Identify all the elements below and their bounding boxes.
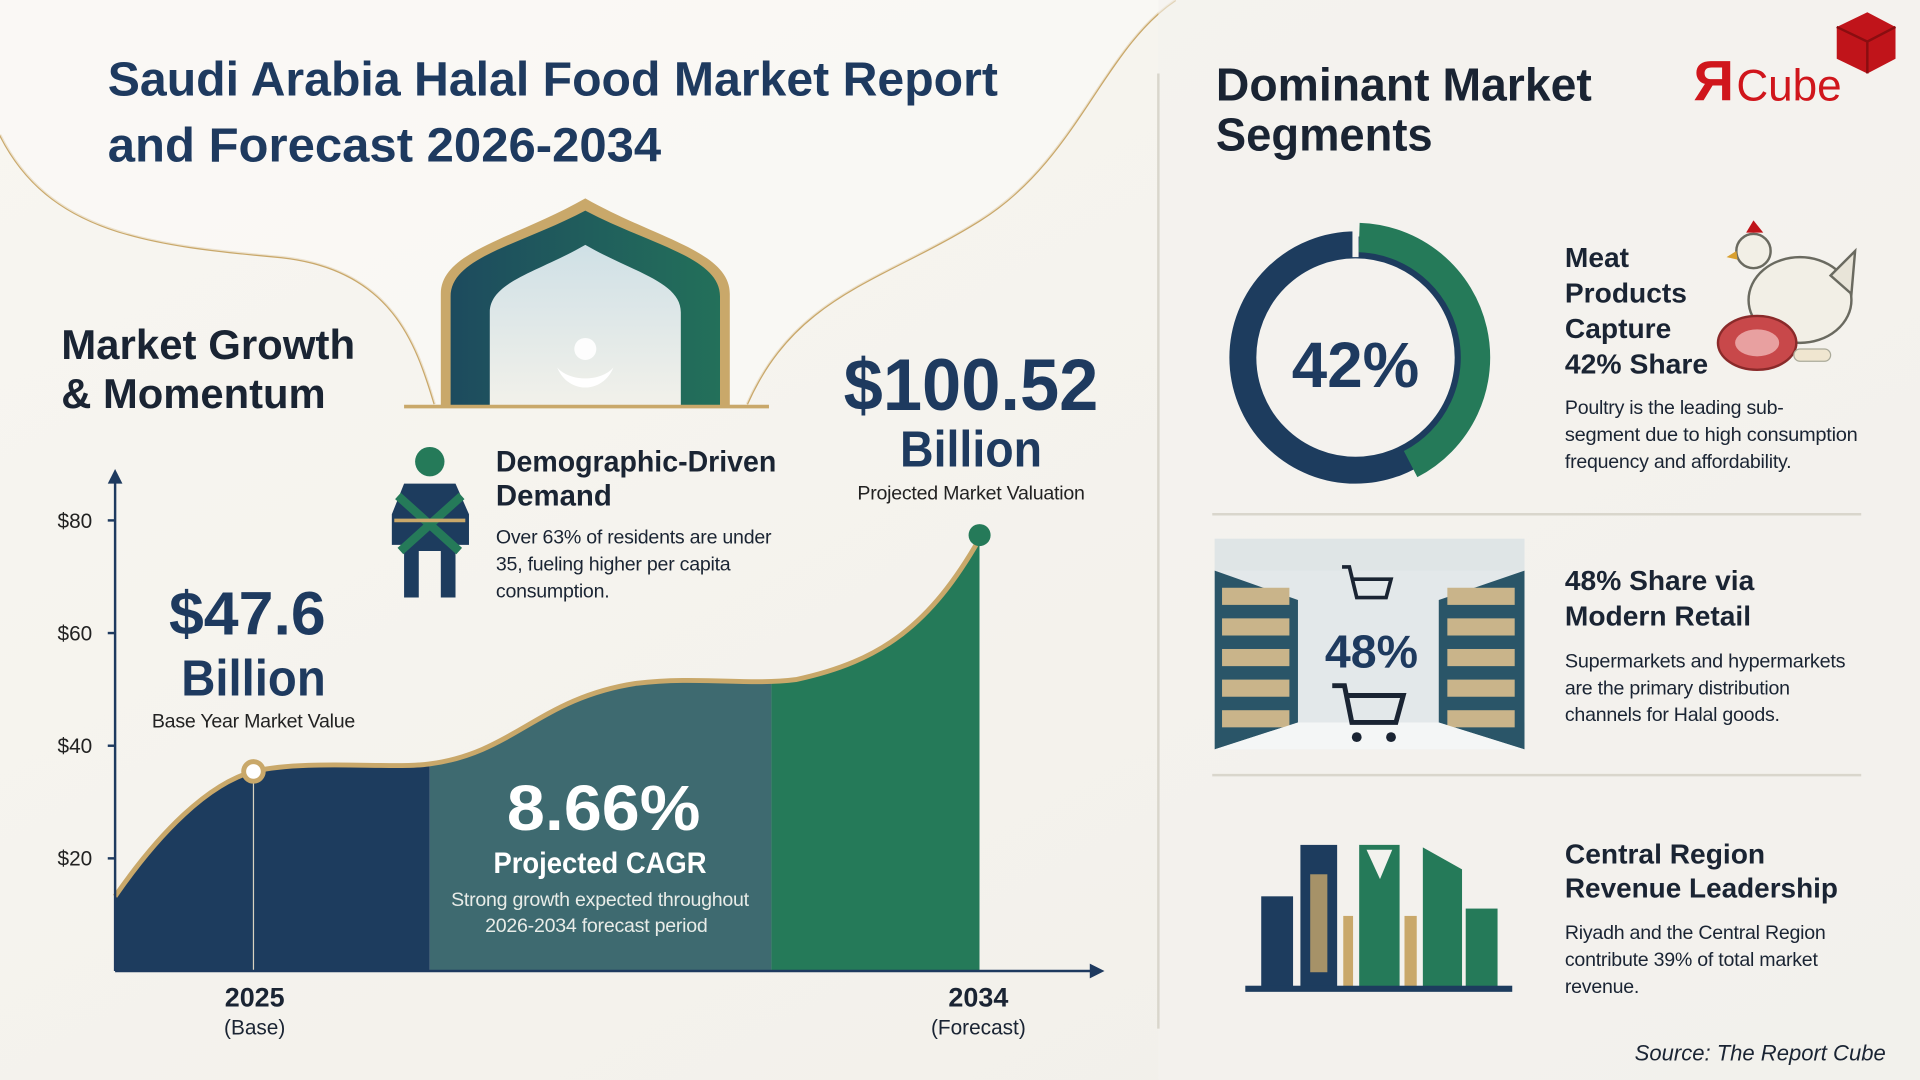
logo: Cube	[1736, 61, 1842, 110]
logo: Я	[1693, 49, 1734, 112]
text: projected value: Projected Market Valuation	[857, 483, 1085, 505]
text: meat products: 42% Share	[1565, 348, 1708, 379]
text: projected value: $100.52	[844, 343, 1098, 426]
text: meat products: Capture	[1565, 313, 1671, 344]
chart: area growth: $80	[58, 510, 92, 533]
text: CAGR: Strong growth expected throughout	[451, 889, 750, 911]
text: demographic demand: 35, fueling higher per capita	[496, 554, 731, 576]
x labels: 2025	[225, 983, 285, 1013]
text: demographic demand: Over 63% of residents are under	[496, 527, 772, 549]
chart: area growth: $40	[58, 735, 92, 758]
text: base value	[152, 579, 355, 732]
x labels: 2034	[948, 983, 1008, 1013]
heading: dominant segments: Segments	[1216, 109, 1433, 161]
icon: person	[392, 447, 469, 598]
text: base value: $47.6	[169, 579, 326, 647]
text: modern retail	[1565, 565, 1846, 726]
text: demographic demand: Demographic-Driven	[496, 445, 776, 478]
chart: area growth: $20	[58, 848, 92, 871]
chart: area growth	[58, 469, 1104, 980]
text: central region: Riyadh and the Central Region	[1565, 922, 1826, 944]
text: central region	[1565, 838, 1838, 998]
text: central region: Revenue Leadership	[1565, 873, 1838, 904]
text: base value: Billion	[181, 649, 326, 707]
text: modern retail: Modern Retail	[1565, 601, 1751, 632]
text: modern retail: channels for Halal goods.	[1565, 704, 1780, 726]
text: meat products	[1565, 242, 1858, 473]
text: projected value: Billion	[900, 420, 1042, 478]
text: central region: contribute 39% of total market	[1565, 949, 1818, 971]
text: demographic demand: consumption.	[496, 581, 609, 603]
icon: retail store: 48%	[1325, 625, 1418, 677]
title: Saudi Arabia Halal Food Market Report	[108, 54, 998, 107]
icon: mosque arch	[404, 198, 769, 407]
text: central region: revenue.	[1565, 976, 1639, 998]
icon: chicken and meat	[1718, 220, 1855, 370]
logo	[1693, 12, 1896, 112]
donut chart: 42%	[1243, 220, 1481, 470]
right panel background	[1158, 0, 1920, 1080]
x labels: (Forecast)	[931, 1017, 1026, 1040]
chart: area growth: $60	[58, 622, 92, 645]
heading: market growth: Market Growth	[61, 321, 355, 368]
text: CAGR: 8.66%	[507, 773, 700, 844]
text: meat products: Products	[1565, 277, 1687, 308]
title	[108, 54, 998, 173]
text: modern retail: Supermarkets and hypermarkets	[1565, 650, 1846, 672]
text: meat products: frequency and affordability.	[1565, 451, 1791, 473]
text: modern retail: 48% Share via	[1565, 565, 1755, 596]
text: CAGR: Projected CAGR	[493, 847, 707, 880]
source: Source: The Report Cube	[1635, 1040, 1886, 1065]
heading: dominant segments: Dominant Market	[1216, 58, 1592, 110]
x labels	[224, 983, 1026, 1040]
x labels: (Base)	[224, 1017, 285, 1040]
text: demographic demand	[496, 445, 776, 603]
text: modern retail: are the primary distribution	[1565, 677, 1790, 699]
text: central region: Central Region	[1565, 838, 1765, 869]
text: meat products: Poultry is the leading sub-	[1565, 397, 1784, 419]
heading: dominant segments	[1216, 58, 1592, 161]
text: meat products: segment due to high consumption	[1565, 424, 1858, 446]
text: CAGR	[451, 773, 750, 937]
text: CAGR: 2026-2034 forecast period	[485, 915, 708, 937]
text: projected value	[844, 343, 1098, 505]
icon: retail store	[1215, 539, 1524, 749]
title: and Forecast 2026-2034	[108, 120, 662, 173]
decorative gold curve	[0, 0, 1176, 404]
text: meat products: Meat	[1565, 242, 1630, 273]
text: base value: Base Year Market Value	[152, 710, 355, 732]
heading: market growth: & Momentum	[61, 370, 326, 417]
heading: market growth	[61, 321, 355, 417]
text: demographic demand: Demand	[496, 480, 612, 513]
icon: city skyline	[1245, 845, 1512, 992]
donut chart: 42%: 42%	[1292, 330, 1419, 401]
